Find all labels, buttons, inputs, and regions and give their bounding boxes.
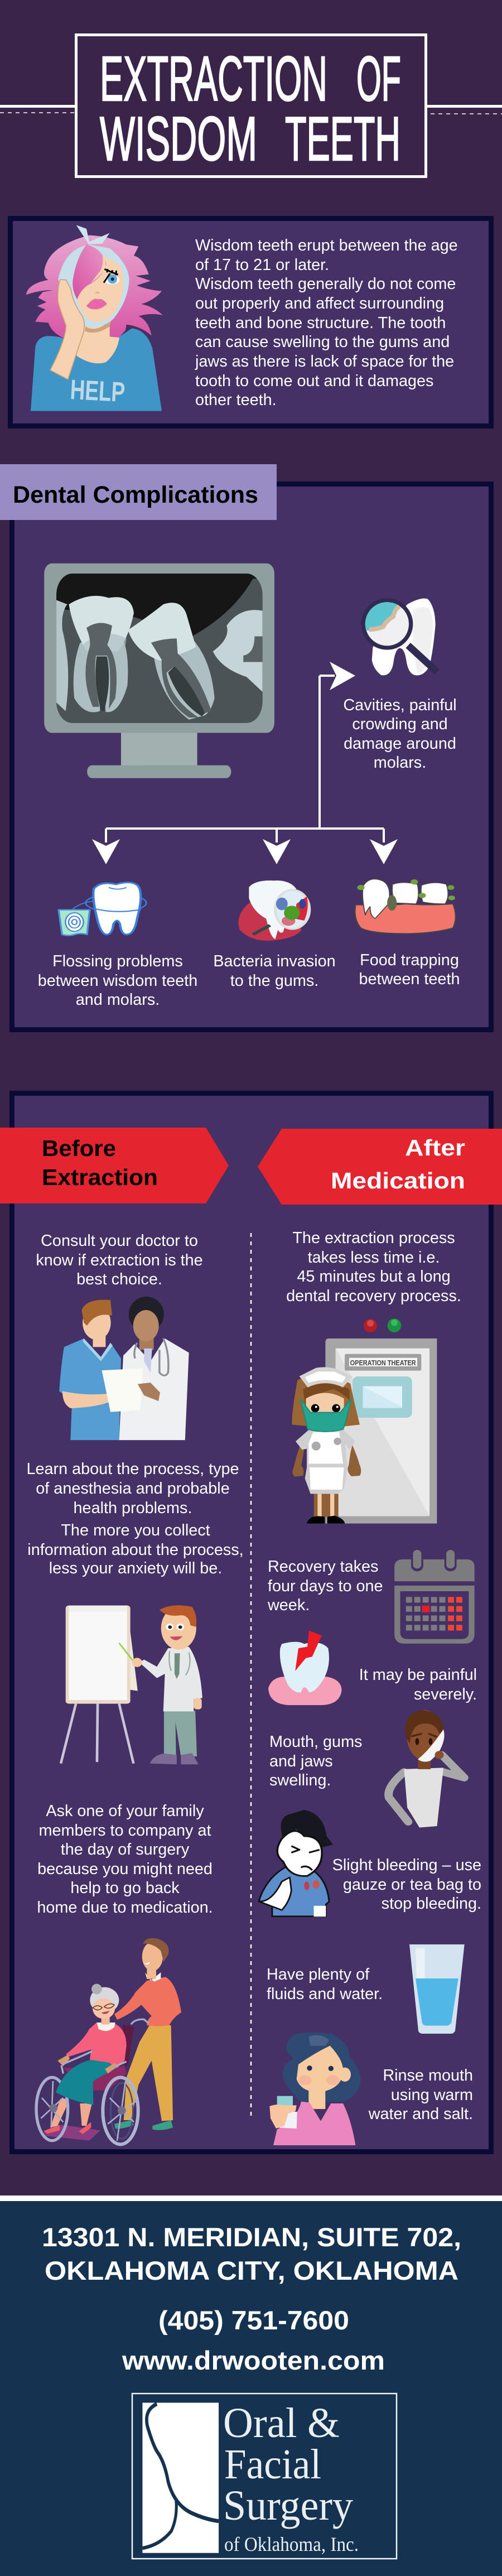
icon: calendar (394, 1549, 475, 1644)
banner: after medication: Medication (331, 1168, 465, 1193)
icon: tooth under magnifier (363, 599, 437, 675)
text: recovery: four days to one (268, 1577, 383, 1595)
text: cavities: molars. (374, 754, 426, 772)
illustration: two doctors (59, 1297, 189, 1440)
illustration: girl with toothache: HELP (69, 374, 126, 408)
text: painful: It may be painful (359, 1666, 477, 1684)
address: OKLAHOMA CITY, OKLAHOMA (45, 2256, 458, 2285)
text: ask family: home due to medication. (37, 1899, 213, 1917)
illustration: boy with bleeding (259, 1810, 333, 1917)
text: painful: severely. (414, 1686, 477, 1703)
illustration: man with swollen jaw (389, 1710, 464, 1828)
text: swelling: Mouth, gums (269, 1733, 362, 1751)
logo wordmark (223, 2400, 359, 2555)
illustration: woman rinsing mouth (269, 2033, 361, 2145)
logo wordmark: Surgery (223, 2482, 353, 2529)
icon: face profile (142, 2402, 219, 2553)
text: painful (359, 1666, 477, 1703)
illustration: man pushing woman in wheelchair (36, 1938, 181, 2144)
text: extraction process: The extraction process (292, 1229, 455, 1247)
text: bacteria (213, 952, 336, 990)
text: bleeding: Slight bleeding – use (332, 1856, 481, 1874)
icon: floss and tooth (59, 883, 146, 936)
title (76, 35, 426, 176)
title: OF (356, 44, 401, 114)
logo wordmark: Facial (224, 2441, 321, 2488)
title: WISDOM (100, 104, 257, 174)
text: cavities: crowding and (352, 715, 448, 733)
intro text: out properly and affect surrounding (195, 295, 444, 312)
text: food trapping: Food trapping (360, 951, 459, 969)
text: ask family (37, 1802, 213, 1917)
text: learn about process: The more you collect (61, 1521, 210, 1539)
divider (250, 1233, 252, 2120)
panel: dental complications (0, 464, 491, 1030)
text: fluids (267, 1966, 383, 2003)
icon: glass of water (409, 1944, 465, 2034)
text: ask family: help to go back (70, 1879, 180, 1897)
text: recovery: Recovery takes (268, 1558, 378, 1576)
text: bacteria: to the gums. (230, 972, 318, 990)
text: bacteria: Bacteria invasion (213, 952, 336, 970)
logo wordmark: Oral & (223, 2400, 340, 2447)
intro text: teeth and bone structure. The tooth (195, 314, 446, 332)
text: ask family: Ask one of your family (46, 1802, 204, 1820)
heading: dental complications: Dental Complications (13, 482, 258, 508)
icon: bacteria on gums (238, 880, 310, 941)
icon: food trapped in teeth (355, 879, 456, 933)
icon: painful tooth (268, 1630, 341, 1705)
footer (0, 2195, 502, 2576)
text: cavities: damage around (344, 735, 456, 753)
text: flossing: Flossing problems (52, 952, 183, 970)
text: extraction process: 45 minutes but a long (297, 1268, 451, 1285)
panel: before and after (0, 1094, 502, 2151)
intro text: of 17 to 21 or later. (195, 256, 329, 274)
intro text: Wisdom teeth erupt between the age (195, 237, 458, 254)
text: swelling: and jaws (269, 1752, 333, 1770)
title: EXTRACTION (100, 44, 327, 114)
intro text: Wisdom teeth generally do not come (195, 275, 456, 293)
text: learn about process (26, 1460, 244, 1577)
text: fluids: fluids and water. (267, 1985, 383, 2003)
text: rinse: using warm (391, 2086, 473, 2104)
logo (132, 2394, 397, 2559)
text: flossing (38, 952, 197, 1009)
intro text: tooth to come out and it damages (195, 372, 433, 390)
text: rinse (368, 2067, 473, 2123)
illustration: nurse at operation theater (292, 1318, 437, 1524)
text: swelling: swelling. (269, 1771, 331, 1789)
intro text: other teeth. (195, 391, 277, 409)
text: consult doctor: Consult your doctor to (41, 1232, 198, 1250)
intro text (195, 237, 458, 409)
text: recovery: week. (267, 1596, 310, 1614)
text: learn about process: health problems. (74, 1499, 192, 1517)
text: learn about process: information about the process, (27, 1541, 244, 1559)
phone: (405) 751-7600 (158, 2305, 349, 2335)
header rule right (423, 105, 502, 114)
text: bleeding: gauze or tea bag to (343, 1876, 481, 1894)
banner: before extraction: Before (42, 1135, 116, 1161)
text: extraction process (286, 1229, 461, 1305)
illustration: doctor at flip chart (61, 1605, 202, 1764)
banner: before extraction: Extraction (42, 1164, 158, 1190)
text: recovery (267, 1558, 383, 1614)
text: ask family: members to company at (39, 1822, 211, 1840)
intro text: can cause swelling to the gums and (195, 333, 450, 351)
text: cavities (343, 696, 457, 772)
text: ask family: because you might need (37, 1860, 213, 1878)
text: consult doctor (36, 1232, 203, 1288)
address (42, 2222, 461, 2285)
text: rinse: Rinse mouth (383, 2067, 473, 2084)
banner: before extraction (0, 1128, 229, 1203)
text: learn about process: of anesthesia and probable (36, 1480, 230, 1498)
arrows: complications flow (92, 662, 398, 864)
illustration: nurse at operation theater: OPERATION THEATER (350, 1359, 416, 1367)
website: www.drwooten.com (122, 2346, 385, 2375)
address: 13301 N. MERIDIAN, SUITE 702, (42, 2222, 461, 2252)
text: consult doctor: best choice. (76, 1270, 162, 1288)
logo wordmark: of Oklahoma, Inc. (224, 2533, 359, 2555)
header rule left (0, 105, 76, 113)
text: cavities: Cavities, painful (343, 696, 457, 714)
panel: introduction (10, 219, 491, 426)
banner: after medication: After (405, 1135, 465, 1161)
text: bleeding (332, 1856, 481, 1913)
text: fluids: Have plenty of (267, 1966, 370, 1983)
heading: dental complications (0, 464, 277, 520)
illustration: girl with toothache (26, 225, 163, 411)
text: extraction process: dental recovery process. (286, 1287, 461, 1305)
text: flossing: and molars. (76, 991, 160, 1009)
text: swelling (269, 1733, 362, 1789)
intro text: jaws as there is lack of space for the (195, 353, 454, 370)
title: TEETH (285, 104, 400, 174)
text: consult doctor: know if extraction is the (36, 1251, 203, 1269)
text: rinse: water and salt. (368, 2105, 473, 2123)
text: food trapping: between teeth (359, 970, 460, 988)
text: learn about process: Learn about the process, type (26, 1460, 239, 1478)
text: ask family: the day of surgery (61, 1841, 190, 1858)
text: flossing: between wisdom teeth (38, 972, 197, 990)
text: extraction process: takes less time i.e. (308, 1249, 440, 1267)
text: bleeding: stop bleeding. (382, 1895, 481, 1913)
banner: after medication (258, 1129, 502, 1205)
text: food trapping (359, 951, 460, 988)
text: learn about process: less your anxiety will be. (49, 1559, 222, 1577)
icon: x-ray monitor (44, 564, 274, 778)
